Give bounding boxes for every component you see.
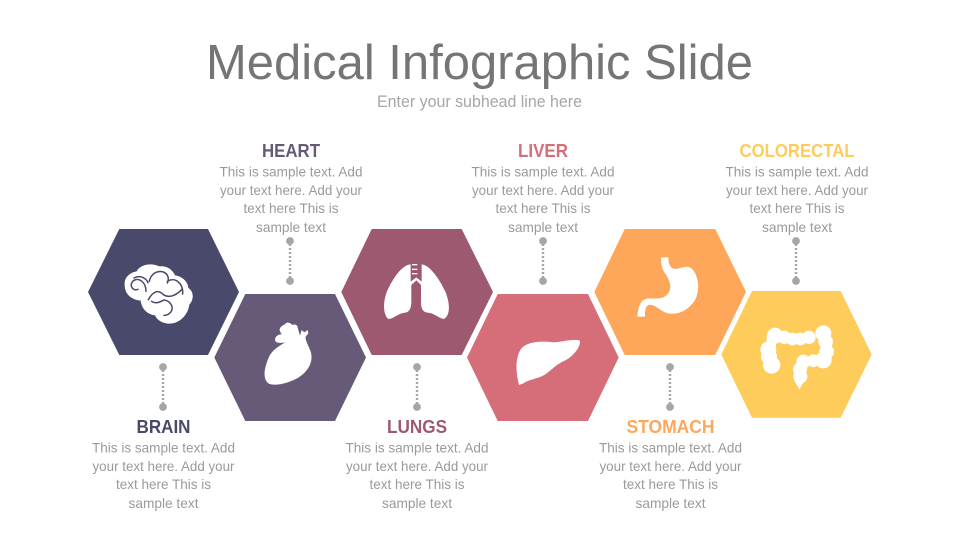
stomach hexagon	[594, 229, 746, 355]
colorectal body text: sample text	[762, 219, 832, 235]
heart body text: This is sample text. Add	[220, 164, 362, 180]
heart connector	[286, 237, 294, 285]
liver body text: This is sample text. Add	[472, 164, 614, 180]
stomach body text: sample text	[636, 495, 706, 511]
colorectal connector	[792, 237, 800, 285]
liver body text: text here This is	[496, 200, 590, 216]
stomach body text	[599, 440, 742, 511]
heart hexagon	[214, 294, 366, 421]
colorectal body text: your text here. Add your	[726, 182, 868, 198]
lungs body text	[346, 440, 488, 511]
panel: lungs	[341, 229, 493, 511]
panel: liver	[467, 140, 619, 421]
stomach body text: This is sample text. Add	[599, 440, 742, 456]
subhead: Enter your subhead line here	[377, 92, 582, 111]
heart body text	[220, 164, 362, 235]
brain body text	[92, 440, 235, 511]
colorectal heading: COLORECTAL	[740, 140, 854, 161]
heart heading: HEART	[262, 140, 321, 161]
stomach heading: STOMACH	[626, 416, 714, 437]
lungs body text: your text here. Add your	[346, 458, 488, 474]
stomach body text: your text here. Add your	[600, 458, 742, 474]
lungs heading: LUNGS	[387, 416, 447, 437]
liver hexagon	[467, 294, 619, 421]
colorectal body text	[726, 164, 868, 235]
brain body text: This is sample text. Add	[92, 440, 235, 456]
liver body text: sample text	[508, 219, 578, 235]
title: Medical Infographic Slide	[206, 36, 753, 90]
liver body text: your text here. Add your	[472, 182, 614, 198]
icon: lungs	[384, 264, 449, 319]
liver connector	[539, 237, 547, 285]
brain hexagon	[88, 229, 239, 355]
panel: brain	[88, 229, 239, 511]
colorectal body text: This is sample text. Add	[726, 164, 868, 180]
panel: stomach	[594, 229, 746, 511]
icon: brain	[125, 264, 193, 324]
liver heading: LIVER	[518, 140, 568, 161]
heart body text: text here This is	[244, 200, 338, 216]
lungs connector	[413, 363, 421, 411]
brain body text: text here This is	[116, 476, 211, 492]
stomach connector	[666, 363, 674, 411]
liver body text	[472, 164, 614, 235]
panel: colorectal	[721, 140, 872, 418]
brain body text: your text here. Add your	[92, 458, 235, 474]
stomach body text: text here This is	[623, 476, 718, 492]
brain body text: sample text	[128, 495, 199, 511]
heart body text: sample text	[256, 219, 326, 235]
lungs body text: sample text	[382, 495, 452, 511]
heart body text: your text here. Add your	[220, 182, 362, 198]
brain heading: BRAIN	[136, 416, 190, 437]
colorectal hexagon	[721, 291, 872, 418]
icon: colon	[760, 325, 834, 389]
lungs body text: This is sample text. Add	[346, 440, 488, 456]
icon: heart	[265, 323, 312, 385]
brain connector	[159, 363, 167, 411]
lungs hexagon	[341, 229, 493, 355]
colorectal body text: text here This is	[750, 200, 844, 216]
icon: liver	[516, 340, 580, 385]
icon: stomach	[637, 257, 698, 317]
panel: heart	[214, 140, 366, 421]
lungs body text: text here This is	[370, 476, 464, 492]
